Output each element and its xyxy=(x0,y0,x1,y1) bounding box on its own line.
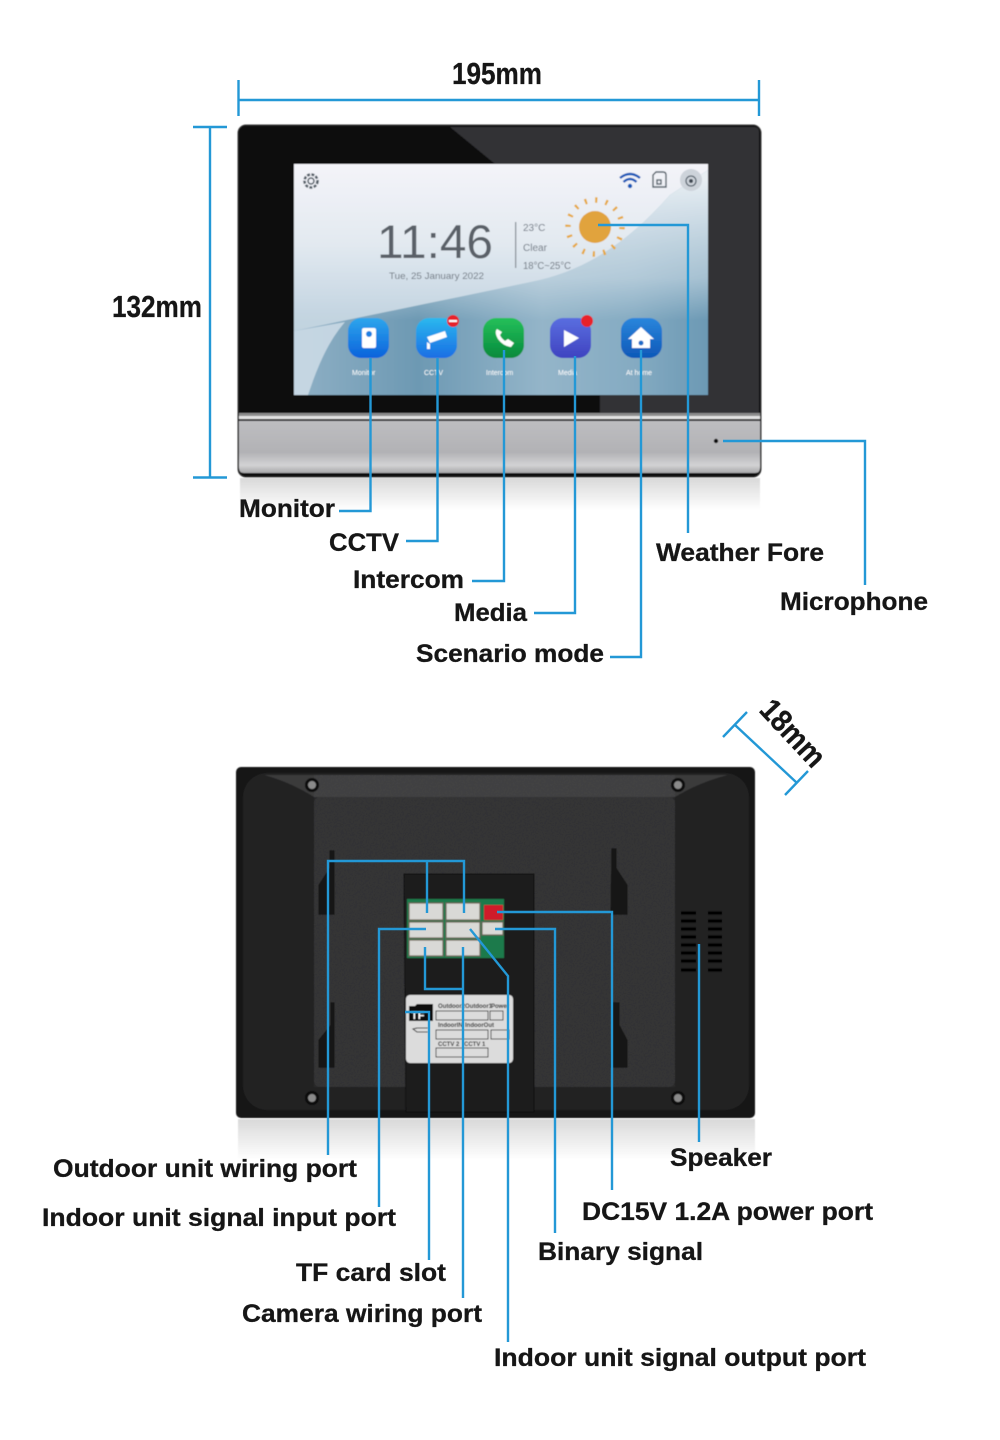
label: microphone: Microphone xyxy=(780,588,928,616)
wiring label sticker: CCTV 2 xyxy=(438,1042,460,1048)
settings icon xyxy=(304,174,318,188)
leader: weather xyxy=(598,225,688,533)
label: dc power port: DC15V 1.2A power port xyxy=(582,1198,874,1226)
weather text: 23°C xyxy=(523,223,545,234)
width label: 195mm xyxy=(452,56,542,91)
chrome strip xyxy=(239,413,760,421)
casing inner tray xyxy=(243,773,749,1110)
icon: media xyxy=(550,315,593,377)
label: weather forecast: Weather Fore xyxy=(656,539,824,567)
tf card icon xyxy=(409,1004,433,1021)
sticker connector outlines xyxy=(436,1011,509,1057)
wifi icon xyxy=(620,174,640,187)
label: binary signal: Binary signal xyxy=(538,1238,703,1266)
weather divider xyxy=(515,222,516,268)
leader: indoor unit signal input port xyxy=(379,929,426,1207)
label: indoor unit signal output port: Indoor unit signal output port xyxy=(494,1344,867,1372)
icon: monitor xyxy=(348,318,389,377)
icon: at home: At home xyxy=(626,370,652,377)
weather text xyxy=(523,223,571,272)
icon: monitor: Monitor xyxy=(352,370,376,377)
wiring label sticker: TF xyxy=(411,1010,425,1022)
depth label: 18mm xyxy=(753,692,833,774)
mounting slots xyxy=(318,848,628,1068)
wiring label sticker: Power xyxy=(491,1004,510,1010)
icon: at home xyxy=(621,318,662,377)
leader: outdoor unit wiring port xyxy=(328,861,464,1155)
rear reflection xyxy=(238,1119,755,1160)
bezel xyxy=(238,125,761,477)
height dimension line 132mm xyxy=(193,127,227,478)
icon: intercom: Intercom xyxy=(486,370,513,377)
icon: intercom xyxy=(483,318,524,377)
height label: 132mm xyxy=(112,289,202,324)
icon: cctv: CCTV xyxy=(424,370,443,377)
wallpaper pale corner xyxy=(294,322,345,395)
insert arrow xyxy=(413,1028,428,1032)
label: camera wiring port: Camera wiring port xyxy=(242,1300,483,1328)
panel texture xyxy=(314,775,675,1087)
power connector xyxy=(484,905,503,920)
label: tf card slot: TF card slot xyxy=(296,1259,447,1287)
wiring label sticker: Outdoor1 xyxy=(465,1004,493,1010)
depth dimension line 18mm xyxy=(723,712,808,795)
label: speaker: Speaker xyxy=(670,1144,772,1172)
label: indoor unit signal input port: Indoor unit signal input port xyxy=(42,1204,397,1232)
power icon xyxy=(680,169,702,191)
leader: scenario mode xyxy=(610,350,641,657)
sun icon xyxy=(568,200,622,254)
panel: front view of monitor xyxy=(238,125,761,510)
leader: monitor xyxy=(339,358,370,511)
speaker grille xyxy=(681,913,722,970)
leader: microphone xyxy=(723,441,865,585)
leader: binary signal xyxy=(495,929,555,1233)
icon: media: Media xyxy=(558,370,577,377)
wiring label sticker: CCTV 1 xyxy=(464,1042,486,1048)
label: scenario mode: Scenario mode xyxy=(416,640,604,668)
leader: indoor unit signal output port xyxy=(470,929,508,1342)
circuit board xyxy=(407,899,504,958)
raised back panel xyxy=(314,797,675,1087)
silver lower panel xyxy=(239,421,760,473)
leader: speaker xyxy=(698,944,700,1142)
wallpaper swoosh xyxy=(294,170,708,395)
central recess xyxy=(404,874,534,1112)
leader: camera wiring port xyxy=(425,947,463,1298)
panel: rear view of monitor xyxy=(236,767,755,1160)
label: outdoor unit wiring port: Outdoor unit wiring port xyxy=(53,1155,358,1183)
label: intercom: Intercom xyxy=(353,566,464,594)
wiring label sticker: IndoorIN xyxy=(438,1023,463,1029)
sd card icon xyxy=(653,172,666,187)
front reflection xyxy=(240,478,760,510)
wallpaper swoosh fade xyxy=(294,170,708,395)
top textured band xyxy=(264,775,728,797)
screen xyxy=(294,164,708,395)
leader: dc power port xyxy=(497,912,612,1190)
microphone hole xyxy=(714,439,718,443)
rear casing xyxy=(236,767,755,1118)
wiring connectors xyxy=(409,903,503,956)
bezel glossy highlight xyxy=(450,127,759,415)
wiring label sticker xyxy=(406,995,513,1063)
leader: tf card slot xyxy=(405,1012,429,1260)
weather text: Clear xyxy=(523,243,548,254)
screws xyxy=(306,780,684,1104)
leader: cctv xyxy=(406,358,438,541)
label: cctv: CCTV xyxy=(329,529,399,557)
wiring label sticker: IndoorOut xyxy=(465,1023,494,1029)
weather text: 18°C~25°C xyxy=(523,261,571,272)
date: Tue, 25 January 2022 xyxy=(389,271,484,282)
leader: media xyxy=(534,356,575,613)
label: media: Media xyxy=(454,599,528,627)
leader: intercom xyxy=(472,350,504,581)
label: monitor: Monitor xyxy=(239,495,335,523)
icon: cctv xyxy=(416,315,459,377)
clock time: 11:46 xyxy=(377,215,493,268)
wiring label sticker: Outdoor2 xyxy=(438,1004,466,1010)
width dimension line 195mm xyxy=(238,80,759,116)
